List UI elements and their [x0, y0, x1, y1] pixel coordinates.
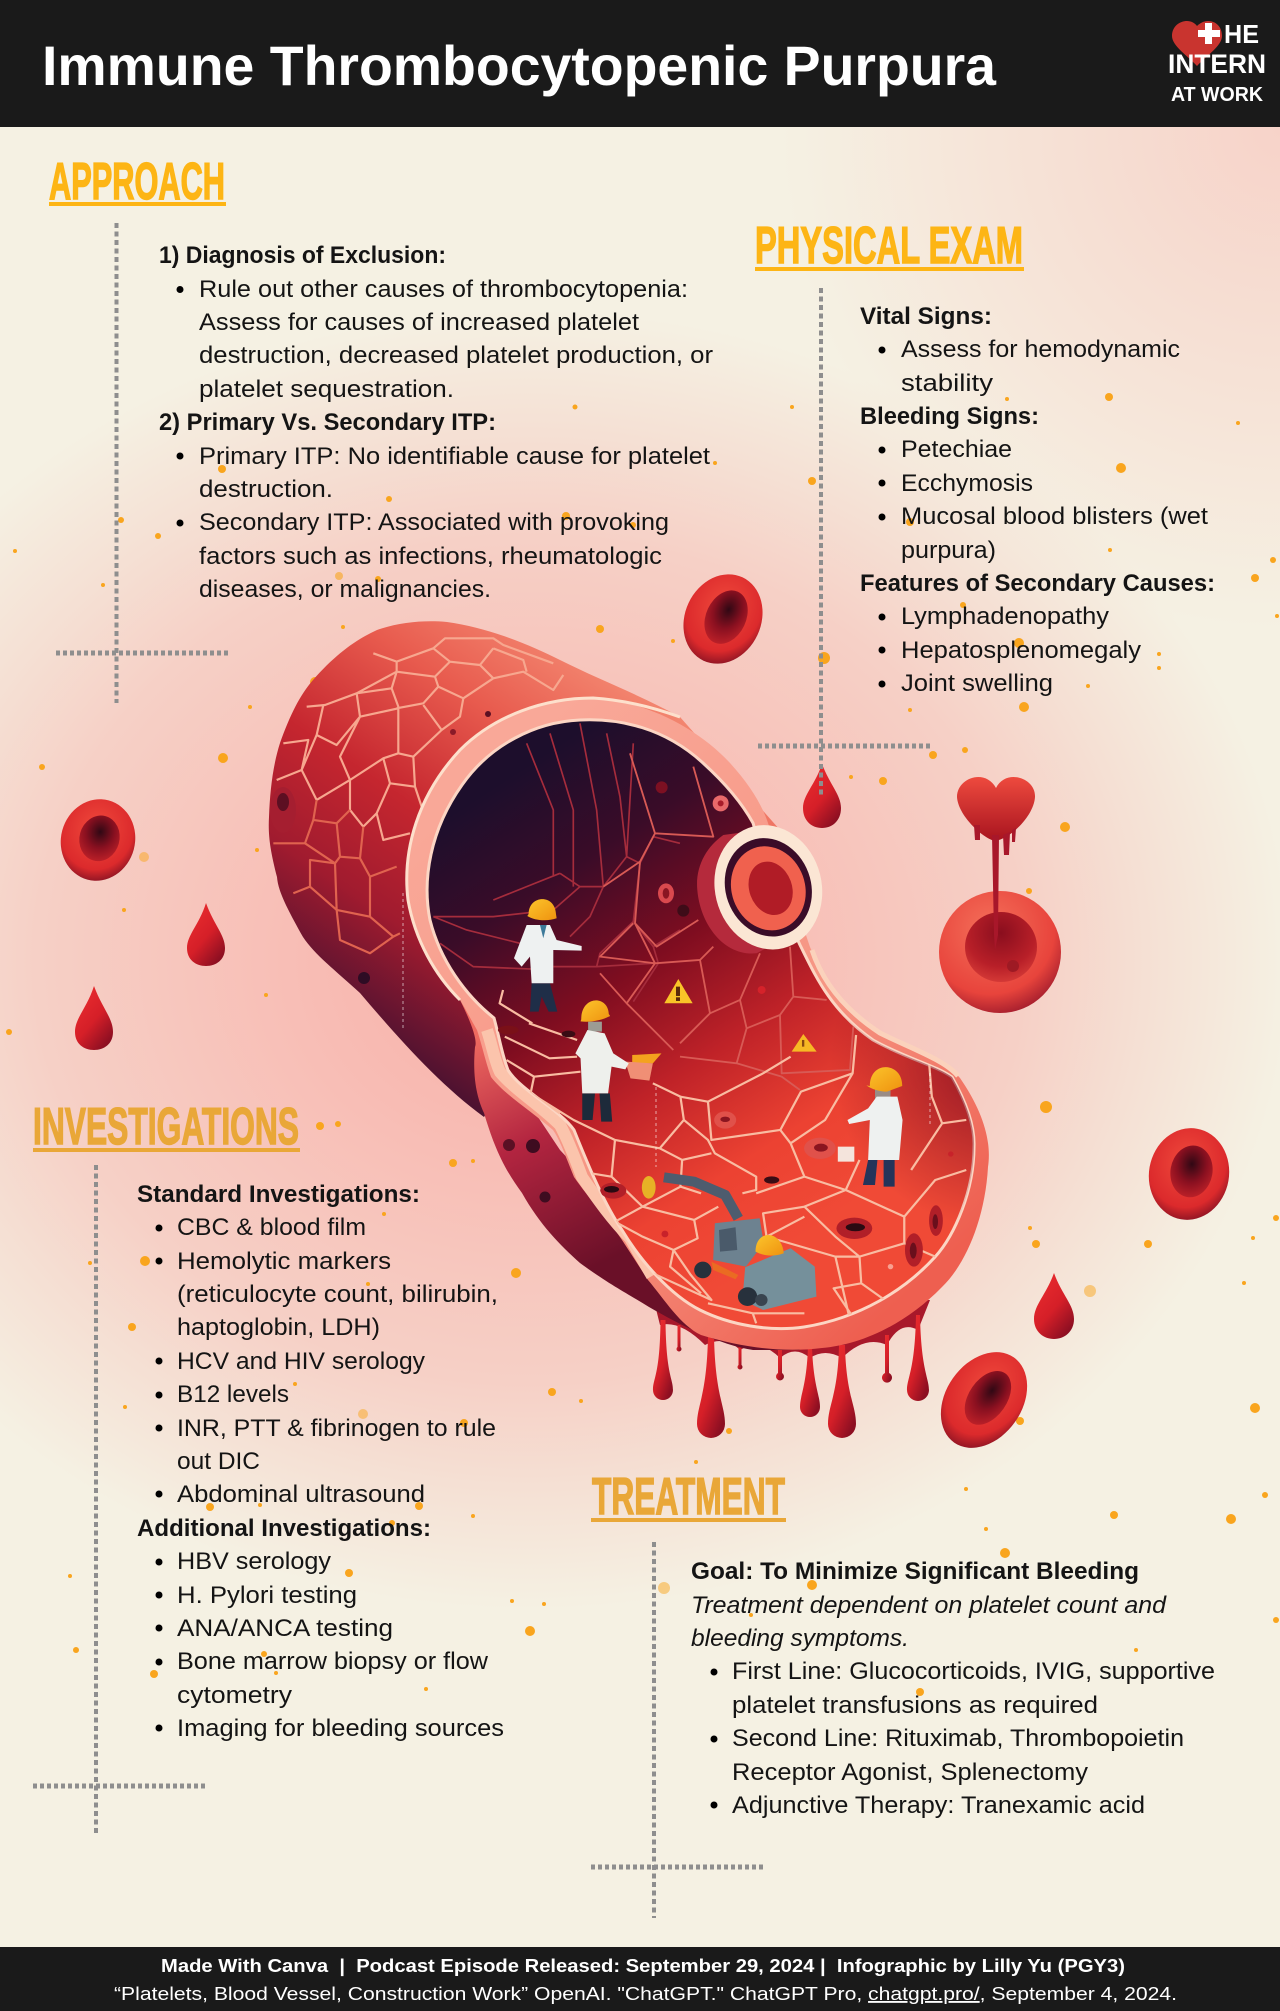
- approach text: diseases, or malignancies.: [199, 576, 491, 603]
- approach text: Assess for causes of increased platelet: [199, 309, 639, 336]
- investigations heading: INVESTIGATIONS: [33, 1098, 299, 1156]
- heart dripping into red blood cell: [939, 777, 1061, 1013]
- physical exam text: Vital Signs:: [860, 303, 992, 330]
- header bar: [0, 0, 1280, 127]
- blood drips under vessel: [653, 1300, 930, 1438]
- investigations text: HCV and HIV serology: [177, 1348, 425, 1375]
- approach text: factors such as infections, rheumatologic: [199, 543, 662, 570]
- physical exam text: Bleeding Signs:: [860, 403, 1039, 430]
- approach text: Primary ITP: No identifiable cause for platelet: [199, 443, 710, 470]
- red blood cell: lower right: [923, 1336, 1045, 1464]
- investigations text: B12 levels: [177, 1381, 289, 1408]
- treatment dashed marker: [591, 1542, 765, 1918]
- footer bar: [0, 1947, 1280, 2011]
- approach heading: [49, 153, 226, 211]
- physical exam text: Mucosal blood blisters (wet: [901, 503, 1208, 530]
- red cell in vessel wall: [697, 814, 835, 961]
- logo: The Intern at Work: INTERN: [1168, 49, 1266, 79]
- physical exam text: Assess for hemodynamic: [901, 336, 1180, 363]
- panel: investigations: [33, 1098, 504, 1836]
- approach text: destruction.: [199, 476, 333, 503]
- investigations text: Abdominal ultrasound: [177, 1481, 425, 1508]
- title: Immune Thrombocytopenic Purpura: [42, 34, 997, 97]
- investigations text: INR, PTT & fibrinogen to rule: [177, 1415, 496, 1442]
- investigations text: ANA/ANCA testing: [177, 1615, 393, 1642]
- blood drop: center: [803, 764, 841, 828]
- treatment text: bleeding symptoms.: [691, 1625, 909, 1652]
- treatment text: platelet transfusions as required: [732, 1692, 1098, 1719]
- physical exam text: Features of Secondary Causes:: [860, 570, 1215, 597]
- treatment text: Adjunctive Therapy: Tranexamic acid: [732, 1792, 1145, 1819]
- investigations text: H. Pylori testing: [177, 1582, 357, 1609]
- treatment text: Second Line: Rituximab, Thrombopoietin: [732, 1725, 1184, 1752]
- investigations text: HBV serology: [177, 1548, 331, 1575]
- investigations text: Hemolytic markers: [177, 1248, 391, 1275]
- worker 2: [575, 1000, 661, 1122]
- vessel outer tube: [269, 621, 780, 1117]
- approach text: Secondary ITP: Associated with provoking: [199, 509, 669, 536]
- approach text: 1) Diagnosis of Exclusion:: [159, 242, 446, 269]
- panel: treatment: [591, 1468, 1215, 1918]
- panel: approach: [49, 153, 713, 703]
- footer citation: “Platelets, Blood Vessel, Construction Work” OpenAI. "ChatGPT." ChatGPT Pro, chatgpt.pro/ , September 4, 2024.: [114, 1983, 1177, 2004]
- investigations text: Additional Investigations:: [137, 1515, 431, 1542]
- worker 1: [514, 899, 582, 1012]
- red blood cell: left: [52, 791, 144, 889]
- physical exam heading: [755, 217, 1024, 275]
- treatment text: Goal: To Minimize Significant Bleeding: [691, 1558, 1139, 1585]
- illustration: blood vessel with construction workers: [269, 621, 1000, 1438]
- logo: The Intern at Work: AT WORK: [1171, 84, 1264, 106]
- investigations text: cytometry: [177, 1682, 292, 1709]
- treatment text: Receptor Agonist, Splenectomy: [732, 1759, 1088, 1786]
- blood drop: right: [1034, 1273, 1074, 1339]
- physical exam heading: PHYSICAL EXAM: [755, 217, 1023, 275]
- vessel rim: [407, 698, 989, 1350]
- approach text: Rule out other causes of thrombocytopenia:: [199, 276, 688, 303]
- investigations text: haptoglobin, LDH): [177, 1314, 380, 1341]
- physical exam text: Hepatosplenomegaly: [901, 637, 1141, 664]
- physical exam text: Petechiae: [901, 436, 1012, 463]
- treatment text: First Line: Glucocorticoids, IVIG, supportive: [732, 1658, 1215, 1685]
- investigations text: out DIC: [177, 1448, 260, 1475]
- warning sign 2: [792, 1034, 817, 1052]
- investigations text: [137, 1181, 504, 1742]
- logo: The Intern at Work: HE: [1224, 19, 1259, 49]
- treatment text: Treatment dependent on platelet count and: [691, 1592, 1167, 1619]
- excavator: [642, 1176, 816, 1310]
- warning sign 1: [664, 979, 693, 1003]
- worker 3: [838, 1067, 903, 1187]
- treatment heading: [591, 1468, 786, 1526]
- approach text: destruction, decreased platelet production, or: [199, 342, 713, 369]
- physical exam text: Joint swelling: [901, 670, 1053, 697]
- investigations text: Bone marrow biopsy or flow: [177, 1648, 489, 1675]
- physical exam text: purpura): [901, 537, 996, 564]
- approach text: platelet sequestration.: [199, 376, 454, 403]
- physical exam dashed marker: [758, 288, 932, 796]
- investigations text: Standard Investigations:: [137, 1181, 420, 1208]
- treatment heading: TREATMENT: [592, 1468, 785, 1526]
- floating platelets: orange dots: [6, 393, 1279, 1696]
- red blood cell: right: [1142, 1122, 1236, 1226]
- tube pores: [270, 711, 491, 984]
- approach heading: APPROACH: [49, 153, 225, 211]
- investigations text: CBC & blood film: [177, 1214, 366, 1241]
- blood drop: left 1: [187, 903, 225, 966]
- investigations text: Imaging for bleeding sources: [177, 1715, 504, 1742]
- panel: physical exam: [755, 217, 1215, 796]
- investigations text: (reticulocyte count, bilirubin,: [177, 1281, 498, 1308]
- physical exam text: Ecchymosis: [901, 470, 1033, 497]
- investigations heading: [33, 1098, 300, 1156]
- physical exam text: [860, 303, 1215, 697]
- vessel network lines: [433, 723, 966, 1323]
- physical exam text: stability: [901, 370, 993, 397]
- approach text: 2) Primary Vs. Secondary ITP:: [159, 409, 496, 436]
- footer credits: Made With Canva | Podcast Episode Released: September 29, 2024 | Infographic by Lilly Yu (PGY3): [161, 1955, 1125, 1976]
- treatment text: [691, 1558, 1215, 1819]
- red blood cell: top: [669, 561, 777, 677]
- blood drop: left 2: [75, 986, 113, 1050]
- physical exam text: Lymphadenopathy: [901, 603, 1109, 630]
- vessel lumen interior: [427, 720, 1000, 1329]
- approach text: [159, 242, 713, 603]
- logo: The Intern at Work: [1168, 19, 1266, 106]
- ghost dotted guide lines: [403, 893, 930, 1167]
- vessel lower wall: [460, 1000, 800, 1350]
- investigations dashed marker: [33, 1165, 207, 1836]
- small cells on vessel floor: [498, 1026, 954, 1269]
- approach dashed marker: [56, 223, 230, 703]
